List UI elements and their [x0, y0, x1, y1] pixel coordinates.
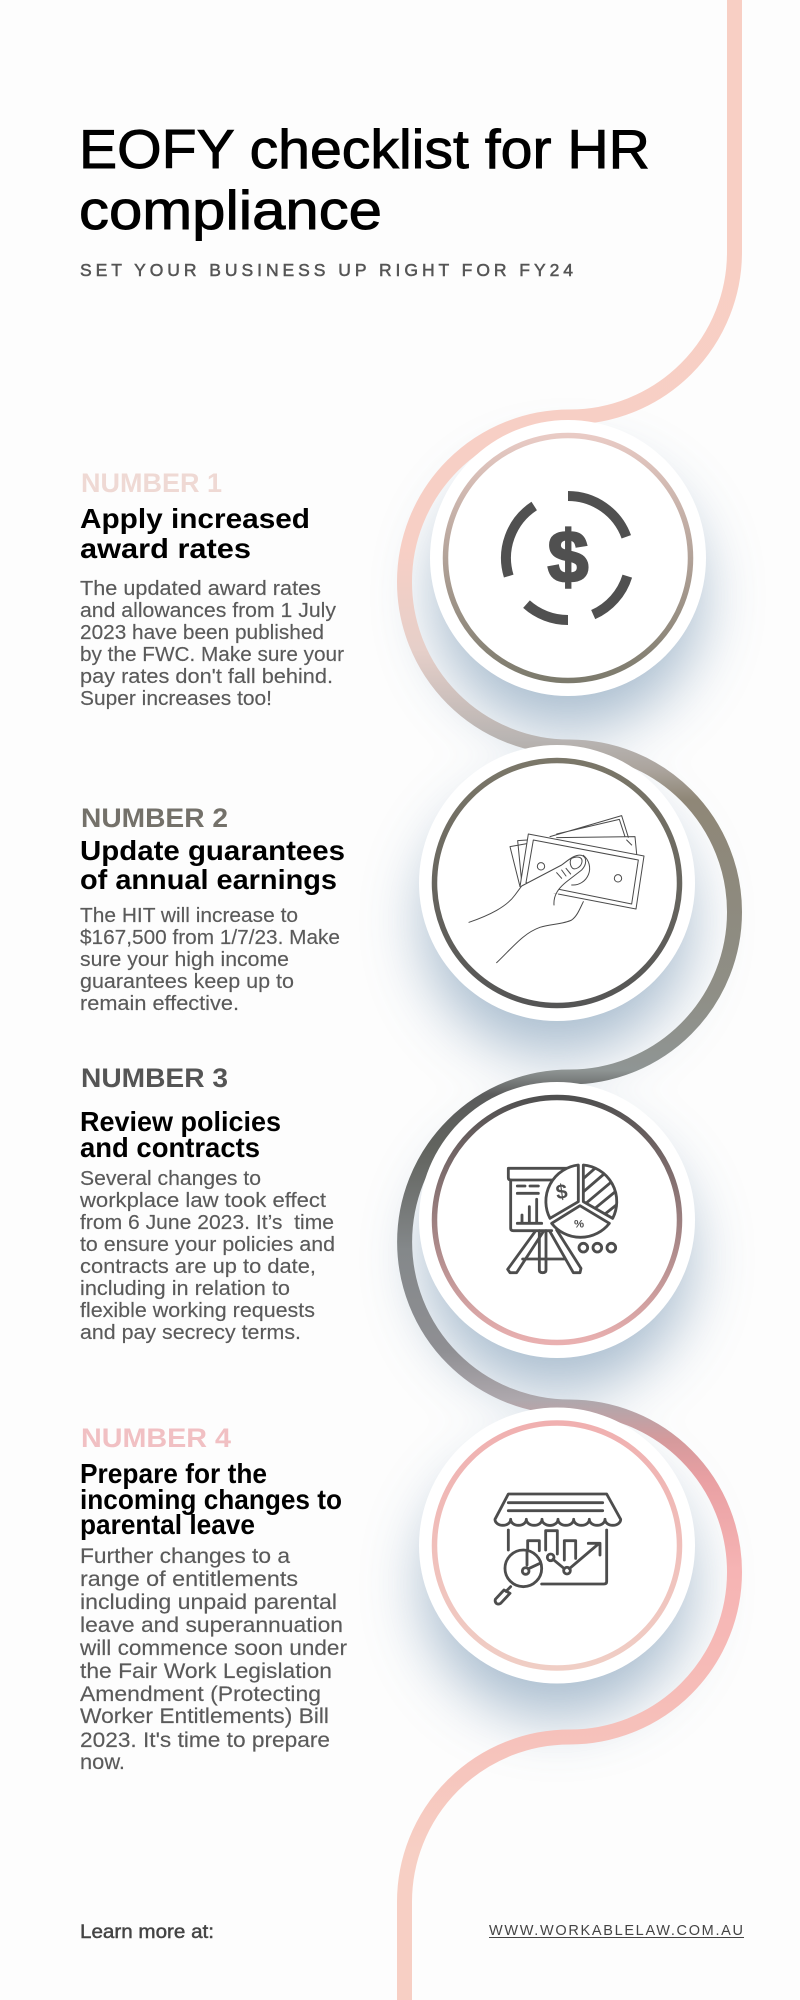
number 2 body: sure your high income — [80, 948, 289, 971]
footer: learn more: Learn more at: — [80, 1921, 214, 1943]
circle 4 — [419, 1408, 695, 1684]
icon: dollar in dashed ring — [506, 496, 627, 620]
number 2 heading: Update guarantees — [80, 835, 345, 866]
number 4 body: range of entitlements — [80, 1567, 298, 1591]
number 4 body: Further changes to a — [80, 1544, 290, 1568]
panel: number 3 text — [79, 1063, 335, 1344]
circle 3 — [419, 1082, 695, 1358]
number 1 heading — [80, 503, 310, 564]
number 2 body — [80, 904, 340, 1015]
icon: presentation board with pie chart: $ — [554, 1180, 570, 1204]
number 1 body: Super increases too! — [80, 687, 272, 710]
number 3 body: to ensure your policies and — [80, 1233, 335, 1256]
number 1 body: by the FWC. Make sure your — [80, 643, 344, 666]
number 4 body: leave and superannuation — [80, 1613, 343, 1637]
number 3 body: including in relation to — [80, 1277, 290, 1300]
number 4 body: 2023. It's time to prepare — [80, 1728, 330, 1752]
icon: presentation board with pie chart — [508, 1165, 618, 1273]
number 4 body: now. — [80, 1750, 125, 1774]
panel: number 4 text — [79, 1423, 347, 1774]
number 4 label: NUMBER 4 — [81, 1423, 231, 1453]
circle 2 — [419, 745, 695, 1021]
number 1 body — [80, 577, 344, 710]
panel: number 1 text — [80, 468, 344, 710]
title: compliance — [79, 179, 382, 241]
footer: website link: WWW.WORKABLELAW.COM.AU — [489, 1923, 743, 1939]
number 4 body: Amendment (Protecting — [80, 1682, 321, 1706]
number 4 heading: Prepare for the — [80, 1458, 267, 1489]
icon: presentation board with pie chart: % — [574, 1218, 584, 1230]
winding gradient path — [404, 0, 734, 2000]
number 4 body: Worker Entitlements) Bill — [80, 1704, 329, 1728]
number 4 heading: incoming changes to — [80, 1484, 342, 1515]
title: EOFY checklist for HR — [79, 118, 650, 180]
number 3 heading: Review policies — [80, 1106, 281, 1137]
number 3 heading — [80, 1106, 281, 1163]
number 3 body: Several changes to — [80, 1167, 261, 1190]
number 1 body: The updated award rates — [80, 577, 321, 600]
number 2 body: guarantees keep up to — [80, 970, 294, 993]
number 3 body: workplace law took effect — [79, 1189, 326, 1212]
number 4 heading: parental leave — [80, 1509, 255, 1540]
number 3 body: contracts are up to date, — [80, 1255, 316, 1278]
title — [79, 118, 650, 241]
number 2 heading — [80, 835, 345, 895]
number 2 body: $167,500 from 1/7/23. Make — [80, 926, 340, 949]
number 2 body: remain effective. — [80, 992, 239, 1015]
number 1 heading: award rates — [80, 533, 251, 564]
number 3 body: flexible working requests — [80, 1299, 315, 1322]
number 3 heading: and contracts — [80, 1132, 260, 1163]
number 1 body: 2023 have been published — [80, 621, 324, 644]
number 4 body: including unpaid parental — [80, 1590, 337, 1614]
icon: shop with chart and magnifier — [495, 1494, 621, 1604]
number 4 body — [79, 1544, 347, 1774]
number 1 body: pay rates don't fall behind. — [80, 665, 333, 688]
number 1 heading: Apply increased — [80, 503, 310, 534]
icon: hand holding banknotes — [469, 816, 644, 963]
circle 1 — [430, 420, 706, 696]
number 3 body: from 6 June 2023. It’s time — [80, 1211, 334, 1234]
number 4 body: will commence soon under — [79, 1636, 347, 1660]
number 2 body: The HIT will increase to — [80, 904, 298, 927]
number 3 body — [79, 1167, 335, 1344]
number 2 heading: of annual earnings — [80, 864, 337, 895]
number 1 body: and allowances from 1 July — [80, 599, 337, 622]
panel: number 2 text — [80, 803, 345, 1015]
circle shadows — [423, 462, 702, 1718]
subtitle: SET YOUR BUSINESS UP RIGHT FOR FY24 — [80, 260, 573, 280]
number 4 body: the Fair Work Legislation — [80, 1659, 332, 1683]
number 1 label: NUMBER 1 — [81, 468, 222, 498]
number 4 heading — [80, 1458, 342, 1540]
icon: dollar in dashed ring: $ — [548, 517, 588, 598]
number 3 body: and pay secrecy terms. — [80, 1321, 301, 1344]
number 2 label: NUMBER 2 — [81, 803, 228, 833]
number 3 label: NUMBER 3 — [81, 1063, 228, 1093]
